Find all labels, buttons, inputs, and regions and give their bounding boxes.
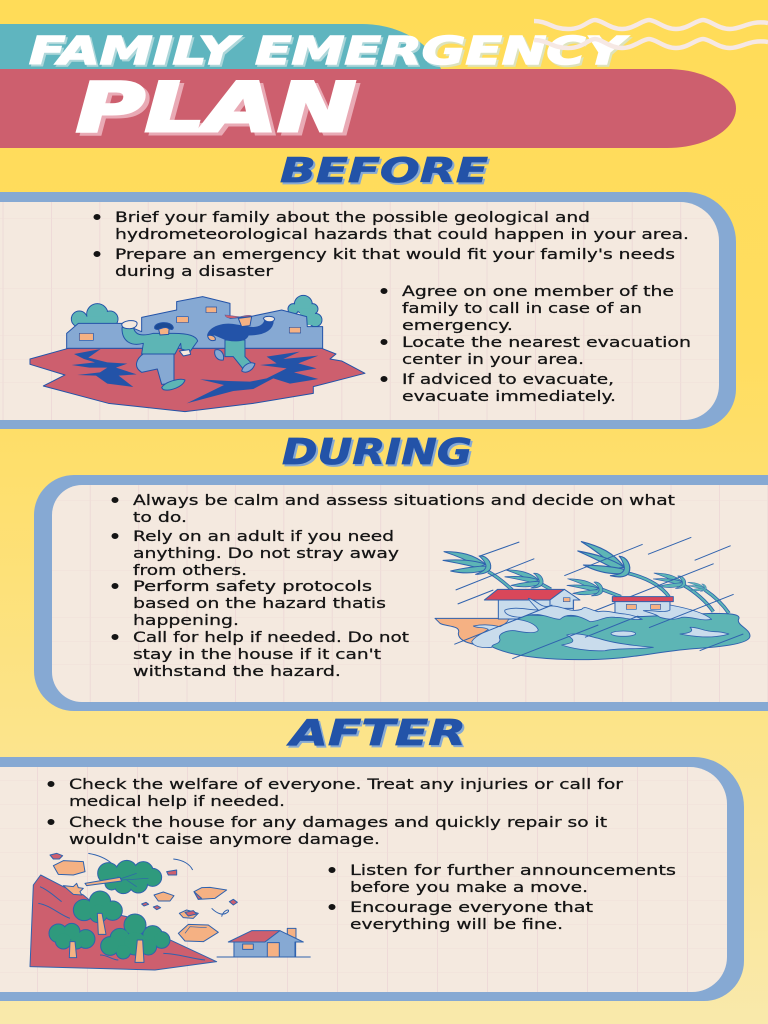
illustration: landslide <box>30 853 311 970</box>
text block: right list: family to call in case of an <box>402 301 642 317</box>
foam <box>472 598 729 651</box>
text block: during list <box>133 493 676 680</box>
text block: top list: hydrometeorological hazards that could happen in your area. <box>115 227 689 243</box>
text block: during list: Always be calm and assess situations and decide on what <box>133 493 676 509</box>
uprooted tree <box>85 860 162 894</box>
text block: during list: happening. <box>133 613 239 629</box>
text block: right list: emergency. <box>402 318 513 334</box>
title line: family emergency: FAMILY EMERGENCY <box>29 29 629 73</box>
text block: top list <box>69 777 623 848</box>
text block: right list: Locate the nearest evacuation <box>402 335 691 351</box>
title banner <box>0 20 768 151</box>
text block: right list: Agree on one member of the <box>402 284 674 300</box>
bushes <box>71 295 322 327</box>
panel: before <box>0 192 736 429</box>
text block: during list: stay in the house if it can't <box>133 647 382 663</box>
cracked ground <box>30 348 365 412</box>
text block: right list: everything will be fine. <box>350 917 563 933</box>
bullets <box>48 781 336 910</box>
sand <box>435 618 517 647</box>
house left <box>484 589 580 619</box>
text block: right list: Listen for further announcements <box>350 863 676 879</box>
panel paper <box>52 485 768 702</box>
panel frame <box>0 757 744 1001</box>
red band <box>0 69 736 148</box>
buildings <box>67 297 323 348</box>
title line: family emergency <box>29 29 631 75</box>
title line: plan <box>76 69 360 151</box>
text block: right list: center in your area. <box>402 352 584 368</box>
text block: during list: anything. Do not stray away <box>133 546 399 562</box>
heading: before: BEFORE <box>280 151 488 191</box>
heading: after <box>286 713 468 756</box>
text block: top list: Brief your family about the possible geological and <box>115 210 590 226</box>
text block: during list: based on the hazard thatis <box>133 596 386 612</box>
house right <box>612 597 673 617</box>
teal band <box>0 24 441 72</box>
cracks <box>72 349 318 403</box>
text block: during list: from others. <box>133 563 247 579</box>
text block: during list: Call for help if needed. Do not <box>133 630 410 646</box>
hill cracks <box>38 887 205 960</box>
text block: top list: Check the welfare of everyone. Treat any injuries or call for <box>69 777 623 793</box>
panel: after <box>0 757 744 1001</box>
tree <box>49 923 95 958</box>
panel frame <box>34 475 768 711</box>
panel: during <box>34 475 768 711</box>
heading: during: DURING <box>284 434 474 475</box>
flood water <box>488 613 750 660</box>
motion lines <box>88 853 229 917</box>
house <box>217 928 311 957</box>
wavy decoration <box>534 20 768 48</box>
text block: top list <box>115 210 689 280</box>
text block: during list: Rely on an adult if you need <box>133 529 394 545</box>
text block: right list: evacuate immediately. <box>402 389 616 405</box>
text block: right list: Encourage everyone that <box>350 900 594 916</box>
text block: top list: during a disaster <box>115 264 273 280</box>
heading: after: AFTER <box>288 715 468 756</box>
text block: right list <box>402 284 691 405</box>
text block: top list: medical help if needed. <box>69 794 285 810</box>
text block: top list: Check the house for any damages and quickly repair so it <box>69 815 608 831</box>
tree <box>101 914 170 962</box>
text block: right list <box>350 863 676 933</box>
panel frame <box>0 192 736 429</box>
rain lines <box>456 537 731 612</box>
palm fronds <box>443 541 706 596</box>
text block: during list: to do. <box>133 510 187 526</box>
heading: before: BEFORE <box>282 153 490 193</box>
text block: during list: Perform safety protocols <box>133 579 372 595</box>
falling rocks <box>50 853 237 942</box>
title line: family emergency: FAMILY EMERGENCY <box>31 31 631 75</box>
text block: right list: before you make a move. <box>350 880 588 896</box>
bullets <box>94 214 388 382</box>
illustration: typhoon flood <box>435 537 750 660</box>
text block: top list: Prepare an emergency kit that would fit your family's needs <box>115 247 675 263</box>
tree <box>73 891 122 934</box>
panel paper <box>0 767 727 992</box>
person: running woman <box>208 315 275 372</box>
heading: after: AFTER <box>286 713 466 754</box>
illustration: earthquake <box>30 295 365 412</box>
person: running man <box>122 321 198 390</box>
text block: right list: If adviced to evacuate, <box>402 372 614 388</box>
text block: top list: wouldn't caise anymore damage. <box>69 832 380 848</box>
panel paper <box>0 202 719 420</box>
text block: during list: withstand the hazard. <box>133 664 341 680</box>
hillside <box>30 875 217 970</box>
heading: before <box>280 151 490 193</box>
palm trunks <box>488 572 729 613</box>
bullets <box>112 497 118 640</box>
title line: plan: PLAN <box>80 72 360 151</box>
windows <box>79 307 301 340</box>
heading: during: DURING <box>282 432 472 473</box>
title line: plan: PLAN <box>76 69 356 148</box>
rain over water <box>454 594 743 659</box>
